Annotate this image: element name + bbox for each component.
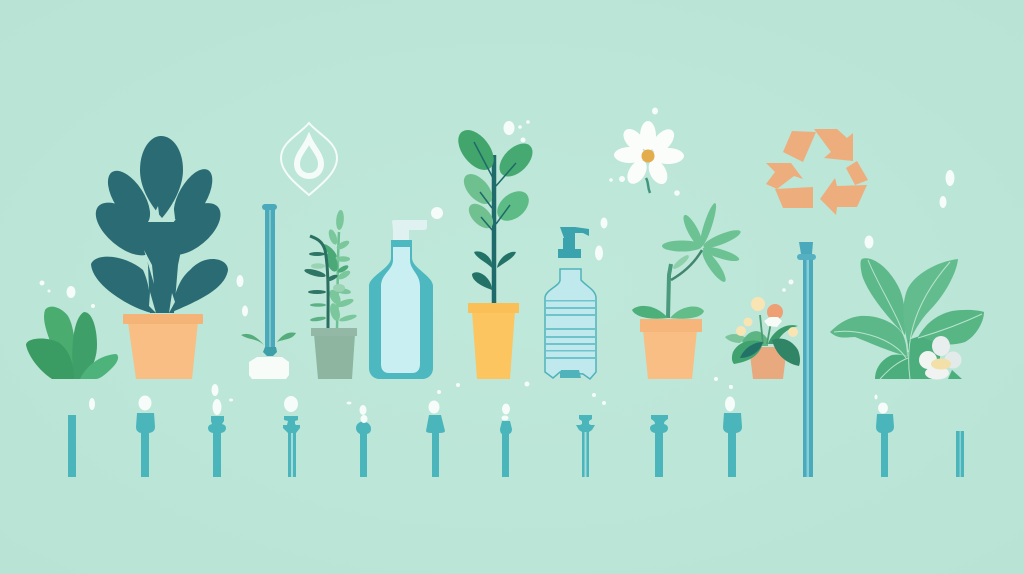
pipe 3 xyxy=(208,416,226,477)
small green plant, far left xyxy=(26,307,118,379)
recycling symbol xyxy=(766,129,868,215)
pipe 10 xyxy=(723,413,742,477)
pipe 11 xyxy=(876,414,894,477)
large dark teal plant in orange pot xyxy=(87,136,230,379)
large leafy plant with white flower xyxy=(830,258,984,380)
clear pump bottle xyxy=(545,227,596,379)
pipe 4 xyxy=(283,416,300,477)
pipe 5 xyxy=(356,421,371,477)
white flower xyxy=(919,336,962,380)
row of teal pipes and white droplets xyxy=(68,413,964,477)
potted plant with spreading leaves xyxy=(632,202,742,379)
orange pot xyxy=(640,319,702,379)
pipe 2 xyxy=(136,413,155,477)
yellow pot xyxy=(468,303,519,379)
pipe 9 xyxy=(650,415,668,477)
thin pipe with sprout on white base xyxy=(241,204,296,379)
pipe 7 xyxy=(500,421,512,477)
tall plant in yellow pot xyxy=(451,124,539,379)
grey pot xyxy=(311,328,357,379)
pipe 6 xyxy=(426,415,445,477)
white droplets and specks xyxy=(40,108,954,423)
pipe 1 xyxy=(68,415,76,477)
small flowering plant in terracotta pot xyxy=(725,297,800,379)
teal bottle with spray cap xyxy=(369,220,433,379)
orange pot xyxy=(123,314,203,379)
pipe 8 xyxy=(576,415,595,477)
white daisy flower xyxy=(614,121,684,193)
water drop icon xyxy=(281,123,337,195)
herb plant in grey pot xyxy=(304,210,357,379)
tall teal pipe xyxy=(797,242,816,477)
pipe 12 xyxy=(956,431,964,477)
